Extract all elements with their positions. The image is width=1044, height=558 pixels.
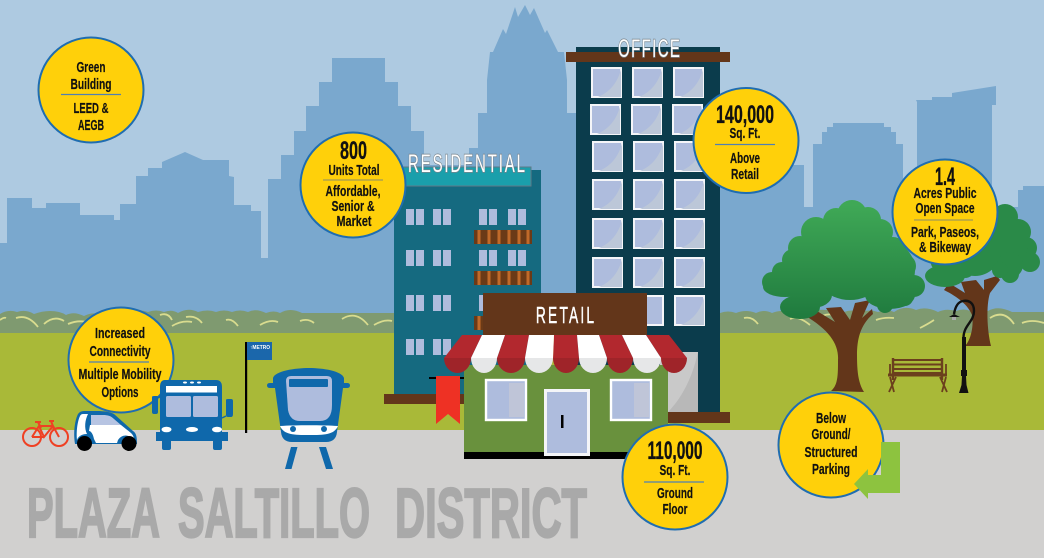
bubble: connectivity	[68, 308, 174, 412]
store body	[464, 365, 668, 452]
store window right	[611, 380, 651, 420]
bubble: green building: LEED &	[74, 101, 109, 117]
road	[0, 430, 1044, 558]
residential sign: RESIDENTIAL	[408, 150, 525, 178]
bubble: green building: AEGB	[78, 118, 104, 134]
bubble: 800 units: Units Total	[328, 163, 380, 179]
bubble: below ground parking: Structured	[804, 445, 858, 461]
train legs	[285, 447, 333, 469]
metro bus stop sign: ↑METRO	[250, 345, 270, 351]
bubble: 800 units: 800	[340, 137, 367, 165]
arrow: parking down-left	[854, 442, 900, 499]
building: residential	[384, 150, 541, 404]
bubble: 1.4 acres: Open Space	[916, 201, 974, 217]
train destination bar	[289, 379, 328, 387]
bubble: below ground parking	[778, 392, 884, 498]
bubble: 800 units: Senior &	[332, 199, 375, 215]
bubble: 110,000 sq ft: Sq. Ft.	[660, 463, 690, 479]
bubble: green building: Green	[76, 60, 106, 76]
roof cornice	[566, 52, 730, 62]
car window	[91, 415, 121, 425]
grey entry wall	[660, 352, 698, 412]
title: plaza saltillo district: DISTRICT	[395, 474, 587, 552]
train body	[267, 368, 350, 442]
bubble: 140,000 sq ft: Sq. Ft.	[730, 126, 760, 142]
bubble: green building: Building	[70, 77, 112, 93]
car lower body	[89, 425, 134, 443]
train front band	[280, 425, 338, 435]
bubble: 140,000 sq ft	[694, 88, 798, 193]
icon: smart car	[74, 411, 137, 451]
building: office tower	[566, 35, 730, 423]
bubble: 800 units: Market	[336, 214, 372, 230]
building: retail store	[444, 293, 687, 459]
residential body	[394, 170, 541, 400]
bubble: 140,000 sq ft: 140,000	[716, 101, 774, 129]
office base	[668, 412, 730, 423]
retail sign board	[483, 293, 647, 335]
bus sign	[166, 386, 217, 392]
bubble: connectivity: Options	[102, 385, 138, 401]
hedge row	[0, 308, 1044, 333]
title: plaza saltillo district: SALTILLO	[178, 474, 370, 552]
mirrors	[152, 396, 233, 417]
title: plaza saltillo district	[27, 474, 587, 552]
bubble: 110,000 sq ft: Floor	[662, 502, 688, 518]
tree: right	[925, 204, 1040, 346]
wheels	[77, 436, 92, 451]
bench	[888, 358, 947, 392]
bubble: below ground parking: Parking	[812, 462, 850, 478]
bubble: below ground parking: Ground/	[812, 427, 850, 443]
bus lights	[162, 382, 222, 432]
office sign: OFFICE	[618, 35, 680, 63]
car shell	[74, 411, 137, 444]
store window left	[486, 380, 526, 420]
balconies	[474, 230, 532, 330]
bubble: below ground parking: Below	[816, 411, 847, 427]
bus body	[156, 380, 228, 450]
train window	[286, 376, 332, 421]
title: plaza saltillo district: PLAZA	[27, 474, 160, 552]
foliage	[925, 204, 1040, 287]
bubble: 110,000 sq ft: Ground	[657, 486, 693, 502]
bubble: 110,000 sq ft: 110,000	[648, 437, 702, 465]
bubble: 110,000 sq ft	[622, 424, 728, 530]
awning	[444, 335, 687, 373]
trunk	[944, 276, 1000, 346]
red banner	[429, 376, 464, 424]
store door	[546, 390, 588, 454]
roof band	[400, 167, 531, 186]
bubble: 1.4 acres: Acres Public	[914, 186, 976, 202]
bubble: green building	[38, 38, 144, 142]
bubble: connectivity: Multiple Mobility	[78, 367, 162, 383]
trunk	[804, 300, 873, 392]
metro bus stop sign	[245, 342, 272, 433]
tower body	[576, 47, 720, 420]
residential base	[384, 394, 474, 404]
bubble: 1.4 acres: Park, Paseos,	[911, 225, 979, 241]
bubble: connectivity: Increased	[95, 326, 145, 342]
bus windshield	[166, 396, 191, 417]
bubble: 140,000 sq ft: Retail	[731, 167, 759, 183]
bubble: 800 units	[300, 132, 406, 238]
car left panel	[77, 414, 88, 440]
bubble: 1.4 acres: & Bikeway	[919, 240, 971, 256]
icon: bicycle	[23, 421, 68, 446]
icon: bus	[152, 380, 233, 450]
icon: light rail train	[267, 368, 350, 469]
office windows	[591, 68, 704, 325]
residential windows	[406, 209, 526, 355]
bubble: 800 units: Affordable,	[326, 184, 380, 200]
retail sign text: RETAIL	[536, 304, 594, 329]
bubble: connectivity: Connectivity	[90, 344, 150, 360]
bubble: 140,000 sq ft: Above	[730, 151, 760, 167]
tree: left	[762, 200, 925, 392]
store base	[464, 452, 668, 459]
foliage	[762, 200, 925, 319]
bubble: 1.4 acres: 1.4	[935, 163, 955, 191]
street lamp	[949, 301, 974, 393]
city skyline silhouette	[0, 5, 1044, 330]
bubble: 1.4 acres	[892, 160, 998, 264]
grass lawn	[0, 333, 1044, 430]
